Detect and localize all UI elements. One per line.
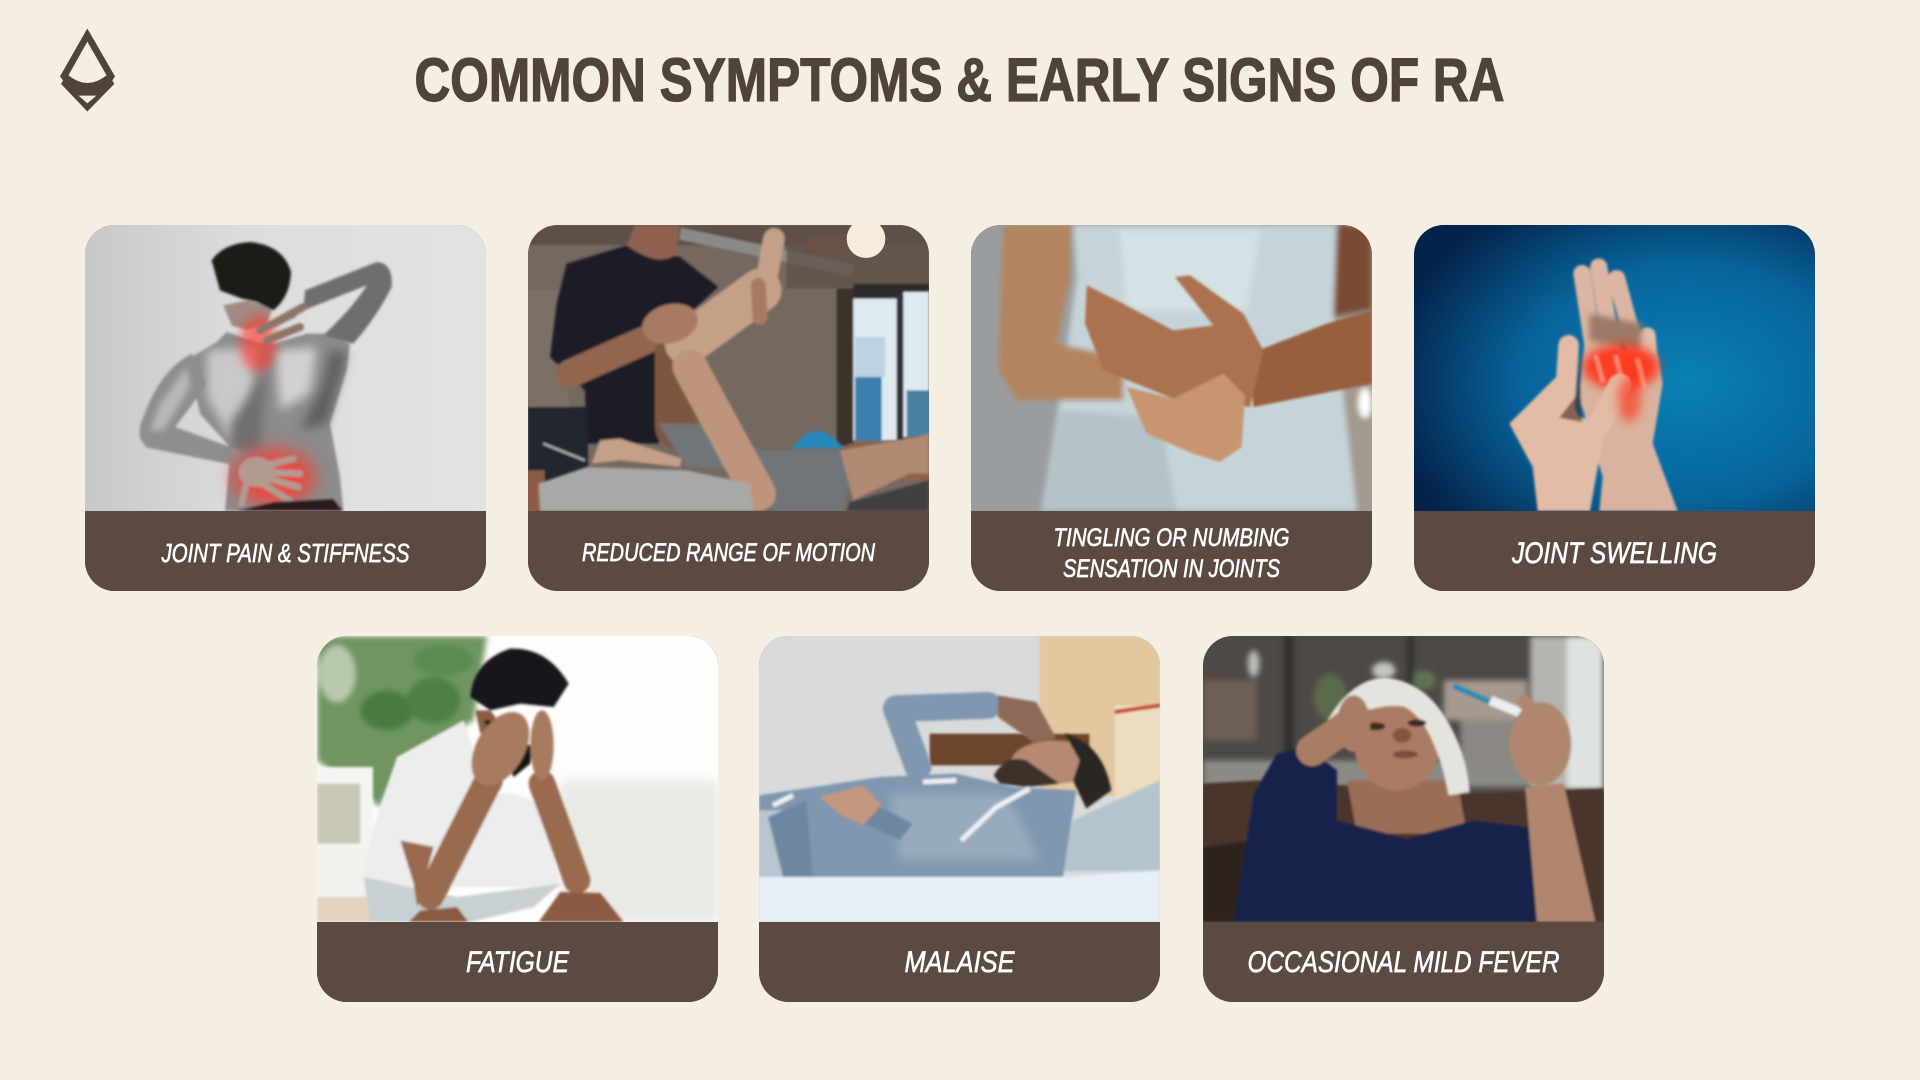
logo icon <box>60 28 115 112</box>
caption <box>1203 922 1604 1002</box>
photo: hand holding a wrist <box>971 225 1372 511</box>
panel: joint swelling <box>1414 225 1815 591</box>
caption <box>317 922 718 1002</box>
caption: SENSATION IN JOINTS <box>1063 555 1280 583</box>
caption: MALAISE <box>904 946 1015 979</box>
panel: tingling or numbing sensation <box>971 225 1372 591</box>
title: COMMON SYMPTOMS & EARLY SIGNS OF RA <box>414 46 1504 114</box>
caption <box>1414 511 1815 591</box>
photo: man holding neck and lower back <box>85 225 486 511</box>
photo: man lying in bed with hand on forehead <box>759 636 1160 922</box>
caption <box>85 511 486 591</box>
panel: joint pain and stiffness <box>85 225 486 591</box>
photo: tired man covering his face <box>317 636 718 922</box>
caption <box>759 922 1160 1002</box>
photo: physiotherapist moving a patient's leg <box>528 225 929 511</box>
panel: occasional mild fever <box>1203 636 1604 1002</box>
panel: malaise <box>759 636 1160 1002</box>
caption <box>971 511 1372 591</box>
panel: reduced range of motion <box>528 225 929 591</box>
photo: woman with towel on head reading a thermometer <box>1203 636 1604 922</box>
panel: fatigue <box>317 636 718 1002</box>
caption: TINGLING OR NUMBING <box>1054 524 1290 552</box>
caption <box>528 511 929 591</box>
photo: hands with glowing red joints <box>1414 225 1815 511</box>
caption: JOINT PAIN & STIFFNESS <box>161 538 410 568</box>
caption: FATIGUE <box>466 946 570 979</box>
caption: JOINT SWELLING <box>1511 537 1717 570</box>
